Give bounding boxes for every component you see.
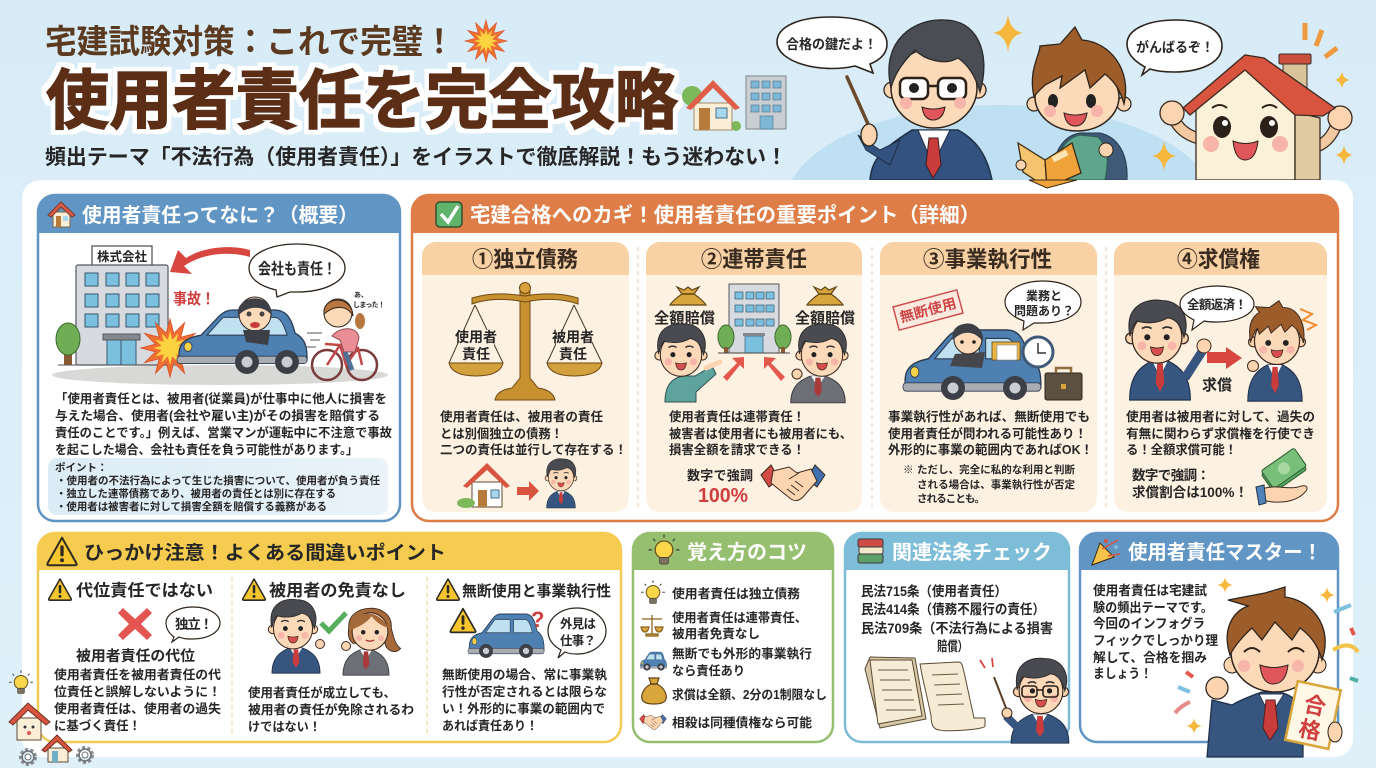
character: house mascot	[1160, 23, 1352, 180]
character: student	[1016, 27, 1131, 188]
column heading: 無断使用と事業執行性	[462, 582, 611, 600]
illustration: car with driver and clock	[903, 324, 1053, 400]
icon: briefcase	[1045, 368, 1082, 400]
callout: key points: ポイント：	[55, 462, 108, 474]
message text	[1093, 583, 1218, 681]
illustration: car with question	[450, 607, 544, 658]
book corner over container	[1029, 180, 1077, 188]
illustration: cyclist: あ、	[354, 291, 368, 299]
figure: reimbursement ratio: 求償割合は100%！	[1132, 484, 1248, 500]
tip 2: 使用者責任は連帯責任、	[672, 610, 807, 625]
tip 3	[640, 646, 812, 678]
card text: 損害全額を請求できる！	[669, 442, 805, 457]
character: teacher	[847, 20, 992, 180]
tip 2	[641, 610, 807, 641]
certificate: 合	[1302, 691, 1328, 720]
header title block	[45, 20, 787, 169]
icon: warning small	[49, 579, 71, 600]
confetti	[1175, 605, 1358, 713]
bubble: teacher: 合格の鍵だよ！	[786, 36, 877, 52]
figure: reimbursement ratio: 数字で強調：	[1132, 467, 1210, 483]
column: no exemption	[243, 579, 414, 734]
caption: 被用者責任の代位	[76, 647, 196, 665]
figure: 100 percent: 100%	[698, 485, 748, 507]
tip 1: 使用者責任は独立債務	[672, 586, 800, 601]
arrow: reimbursement	[1207, 347, 1242, 369]
background hill behind characters	[785, 105, 1215, 305]
stamp: unauthorized use	[893, 290, 963, 330]
panel: overview	[37, 194, 401, 521]
illustration: balance scale: 被用者	[552, 329, 594, 345]
column: not vicarious	[49, 579, 221, 733]
column text: 位責任と誤解しないように！	[54, 684, 221, 699]
card heading: ④求償権	[1177, 247, 1260, 272]
icon: tree	[56, 323, 80, 365]
card text: 使用者は被用者に対して、過失の	[1126, 409, 1315, 424]
figure: reimbursement ratio	[1132, 467, 1248, 500]
statute list: 民法414条（債務不履行の責任）	[861, 601, 1045, 617]
icon: party popper	[1092, 539, 1120, 565]
certificate: 格	[1296, 716, 1323, 745]
tip 3: 無断でも外形的事業執行	[672, 646, 812, 661]
bubble: looks like work: 外見は	[560, 616, 596, 631]
icon: money on hand	[1256, 448, 1308, 505]
column text: 行性が否定されるとは限らな	[442, 684, 607, 699]
column text: けではない！	[248, 720, 321, 734]
card text	[440, 409, 627, 457]
heading: 覚え方のコツ	[687, 541, 807, 564]
icon: handshake	[761, 465, 825, 501]
bubble: related to work: 問題あり？	[1014, 304, 1074, 318]
person: employee surprised	[1248, 301, 1316, 401]
panel: key points	[411, 194, 1339, 521]
message text: 験の頻出テーマです。	[1093, 600, 1213, 615]
icon: house and office building	[682, 76, 786, 131]
person: victim	[655, 324, 720, 402]
subtitle: 頻出テーマ「不法行為（使用者責任）」をイラストで徹底解説！もう迷わない！	[45, 146, 787, 169]
card text: 使用者責任は、被用者の責任	[440, 409, 603, 424]
bubble: repay in full	[1180, 286, 1254, 330]
statute list: 民法715条（使用者責任）	[861, 583, 1007, 599]
illustration: cyclist	[306, 291, 385, 380]
illustration: balance scale: 責任	[559, 346, 587, 362]
column text: 使用者責任は、使用者の過失	[54, 701, 221, 716]
column heading: 代位責任ではない	[76, 581, 213, 600]
illustration: balance scale	[449, 282, 602, 400]
ground	[52, 365, 388, 385]
illustration: car with question: ?	[531, 607, 544, 632]
tips list	[640, 580, 827, 730]
statute list	[861, 583, 1053, 654]
arrow: responsibility to company	[170, 247, 250, 274]
label: reimbursement: 求償	[1202, 376, 1232, 394]
note	[903, 463, 1076, 505]
certificate	[1285, 681, 1341, 749]
bubble: company liable	[249, 244, 345, 297]
illustration: balance scale: 責任	[462, 346, 490, 362]
card: right of reimbursement	[1114, 242, 1327, 512]
text block: definition: 与えた場合、使用者(会社や雇い主)がその損害を賠償する	[55, 408, 380, 423]
card text	[1126, 409, 1315, 457]
card: independent obligation	[422, 242, 629, 512]
callout: key points	[48, 458, 388, 515]
message text: 解して、合格を掴み	[1093, 650, 1207, 665]
tagline: 宅建試験対策：これで完璧！	[45, 23, 455, 60]
column text	[248, 685, 414, 734]
card text	[888, 409, 1093, 457]
heading: 使用者責任ってなに？（概要）	[82, 204, 358, 227]
card heading: ③事業執行性	[923, 247, 1052, 272]
column text: 無断使用の場合、常に事業執	[442, 667, 607, 682]
panel: master	[1079, 532, 1339, 742]
figure: 100 percent: 数字で強調	[687, 468, 753, 483]
card heading: ①独立債務	[472, 247, 578, 272]
column heading: 被用者の免責なし	[269, 581, 406, 600]
icon: warning small	[243, 579, 265, 600]
bubble: repay in full: 全額返済！	[1187, 297, 1247, 312]
heading: 使用者責任マスター！	[1128, 541, 1322, 564]
note: ※	[903, 464, 914, 476]
message text: 今回のインフォグラ	[1093, 616, 1205, 631]
heading: ひっかけ注意！よくある間違いポイント	[84, 541, 446, 564]
main title: 使用者責任を完全攻略	[46, 64, 678, 137]
icon: bulb	[649, 534, 679, 564]
text block: definition: 「使用者責任とは、被用者(従業員)が仕事中に他人に損害を	[55, 391, 387, 406]
statute list: 民法709条（不法行為による損害	[861, 620, 1053, 636]
column text: あれば責任あり！	[442, 718, 538, 733]
message text: 使用者責任は宅建試	[1093, 583, 1207, 598]
message text: フィックでしっかり理	[1093, 633, 1218, 648]
illustration: car with driver	[177, 297, 307, 374]
tip 2: 被用者免責なし	[672, 626, 760, 641]
card text: 事業執行性があれば、無断使用でも	[888, 409, 1090, 424]
icon: house to person	[457, 459, 577, 508]
card text: る！全額求償可能！	[1126, 442, 1237, 457]
icon: office building	[76, 246, 168, 365]
tip 3: なら責任あり	[672, 663, 745, 678]
bubble: independent: 独立！	[175, 616, 213, 632]
column text	[54, 667, 221, 733]
bubble: related to work: 業務と	[1026, 288, 1062, 303]
panel: memory tips	[632, 532, 834, 742]
column text: に基づく責任！	[54, 718, 141, 733]
person: employee	[791, 324, 848, 403]
card text: 有無に関わらず求償権を行使でき	[1126, 426, 1315, 441]
character: teacher small	[980, 658, 1069, 743]
card text: 使用者責任が問われる可能性あり！	[888, 426, 1087, 441]
decoration: bulb, houses and gears	[9, 670, 92, 764]
panel: related statutes	[844, 532, 1070, 743]
heading: 宅建合格へのカギ！使用者責任の重要ポイント（詳細）	[470, 204, 980, 227]
text block: definition: 責任のことです。」例えば、営業マンが運転中に不注意で事故	[55, 425, 392, 440]
icon: money bags	[670, 287, 843, 305]
statute list: 賠償）	[937, 639, 968, 654]
column: unauthorized use	[437, 579, 611, 733]
text block: definition	[55, 391, 392, 457]
tip 4	[642, 678, 827, 704]
arrows to building	[723, 357, 785, 381]
tip 5: 相殺は同種債権なら可能	[672, 715, 812, 730]
sparkle stars	[993, 14, 1353, 171]
card heading: ②連帯責任	[701, 247, 807, 272]
bubble: independent	[166, 607, 220, 642]
tip 1	[641, 580, 800, 603]
note: される場合は、事業執行性が否定	[917, 478, 1076, 491]
person: employer	[1126, 300, 1211, 400]
card text: 二つの責任は並行して存在する！	[440, 442, 627, 457]
illustration: man and woman	[268, 599, 401, 675]
panel: common mistakes	[37, 532, 622, 742]
callout: key points: ・使用者は被害者に対して損害全額を賠償する義務がある	[56, 500, 327, 513]
bubble: related to work	[1005, 281, 1081, 330]
bubble: student: がんばるぞ！	[1136, 39, 1214, 55]
card text: 被害者は使用者にも被用者にも、	[669, 426, 852, 441]
callout: key points: ・使用者の不法行為によって生じた損害について、使用者が負う責任	[56, 474, 380, 487]
note: ただし、完全に私的な利用と判断	[917, 463, 1076, 476]
tip 4: 求償は全額、2分の1制限なし	[672, 687, 827, 702]
bubble: student	[1127, 20, 1222, 75]
bubble: looks like work	[548, 608, 606, 658]
bubble: teacher	[777, 17, 887, 73]
card text: 使用者責任は連帯責任！	[669, 409, 805, 424]
figure: 100 percent	[687, 468, 753, 507]
bubble: looks like work: 仕事？	[560, 633, 596, 648]
stamp: unauthorized use: 無断使用	[898, 295, 958, 325]
illustration: balance scale: 使用者	[455, 329, 497, 345]
column text	[442, 667, 607, 733]
icon: house	[48, 202, 75, 227]
heading: 関連法条チェック	[892, 540, 1052, 564]
bubble: company liable: 会社も責任！	[258, 260, 336, 278]
card text: 外形的に事業の範囲内であればOK！	[888, 442, 1093, 457]
column text: い！外形的に事業の範囲内で	[442, 701, 605, 716]
text block: definition: を起こした場合、会社も責任を負う可能性があります。」	[55, 442, 358, 457]
column text: 被用者の責任が免除されるわ	[248, 702, 414, 717]
character: successful student	[1175, 577, 1358, 757]
illustration: cyclist: しまった！	[353, 301, 385, 309]
icon: books	[858, 539, 883, 563]
card text	[669, 409, 852, 457]
label: accident: 事故！	[173, 289, 215, 308]
card: scope of business	[880, 242, 1097, 512]
icon: burst	[465, 20, 507, 62]
illustration: building	[718, 284, 791, 353]
labels: full compensation: 全額賠償	[795, 309, 855, 327]
labels: full compensation	[654, 309, 855, 327]
icon: cross	[118, 608, 152, 640]
card: joint liability	[646, 242, 862, 512]
sparkles	[1186, 577, 1335, 734]
icon: warning	[47, 538, 77, 565]
icon: office building: 株式会社	[97, 249, 147, 264]
icon: warning small	[437, 579, 459, 600]
column text: 使用者責任が成立しても、	[248, 685, 396, 700]
callout: key points: ・独立した連帯債務であり、被用者の責任とは別に存在する	[56, 487, 336, 500]
labels: full compensation: 全額賠償	[654, 309, 715, 327]
illustration: book and scroll	[865, 657, 985, 731]
main white container	[22, 180, 1353, 757]
column text: 使用者責任を被用者責任の代	[54, 667, 221, 682]
note: されることも。	[917, 493, 985, 505]
icon: checkmark	[436, 202, 462, 227]
card text: とは別個独立の債務！	[440, 426, 563, 441]
message text: ましょう！	[1093, 666, 1152, 681]
icon: crash burst	[141, 319, 199, 377]
